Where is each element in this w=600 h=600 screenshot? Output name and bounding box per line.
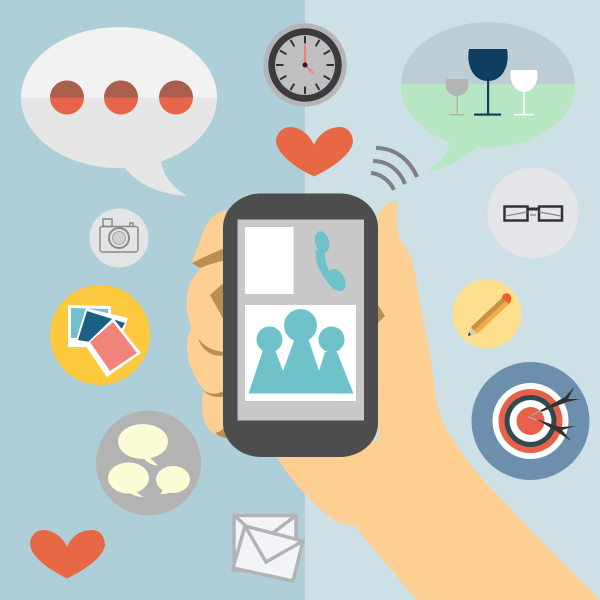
icon: telephone handset: [312, 230, 349, 294]
speech bubble: typing dots: [21, 27, 217, 196]
wine glass: white: [510, 70, 538, 115]
icon: chat bubbles: [96, 410, 201, 516]
icon: camera: [90, 208, 148, 268]
icon: red heart top: [276, 127, 353, 176]
icon: glasses: [488, 168, 578, 258]
speech bubble: wine glasses: [401, 22, 575, 173]
arrow: upper dart: [532, 386, 580, 415]
phone body: [223, 194, 378, 457]
icon: photos: [50, 285, 150, 385]
hand: shadow at thumb: [378, 305, 385, 323]
phone screen: [238, 220, 364, 420]
icon: red heart bottom: [30, 530, 105, 578]
hand: fingers: [187, 209, 238, 438]
hand: palm and thumb: [277, 201, 600, 600]
icon: pencil: [452, 280, 522, 348]
icon: clock: [263, 23, 347, 107]
icon: target: [472, 362, 590, 480]
background: right panel: [305, 0, 600, 600]
wine glass: navy: [468, 49, 508, 116]
screen: group photo card: [245, 305, 356, 401]
wine glass: grey: [446, 79, 468, 116]
screen: blank card: [245, 227, 294, 294]
icon: envelopes: [233, 516, 303, 581]
background: left panel: [0, 0, 305, 600]
icon: wifi signal: [371, 148, 417, 190]
arrow: lower dart: [528, 417, 576, 441]
